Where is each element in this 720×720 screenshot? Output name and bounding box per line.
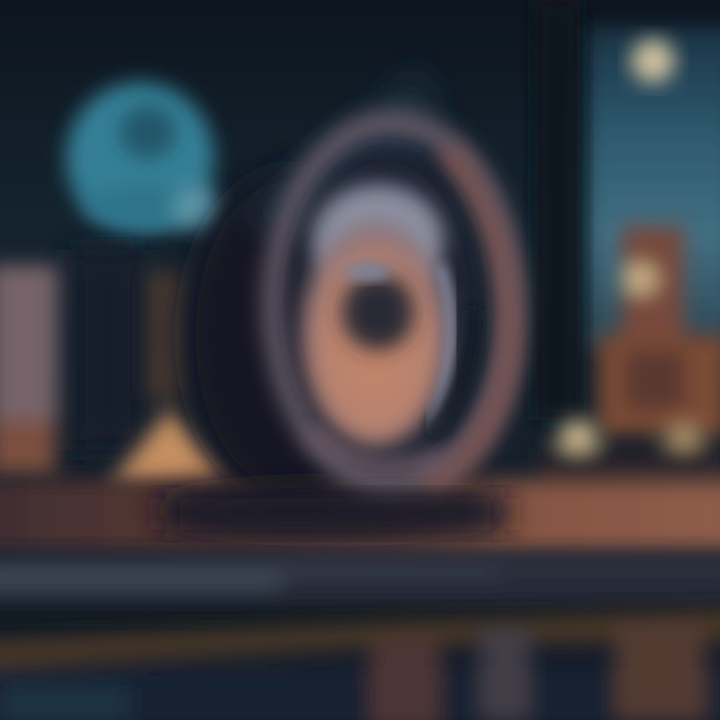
right inner ring (432, 265, 451, 425)
pale upper band (312, 184, 444, 296)
wheel face (301, 223, 449, 447)
dark support under circle (70, 250, 145, 450)
lower ring (310, 430, 445, 466)
hub (342, 274, 414, 350)
icon: teal circle (66, 82, 220, 234)
wheel body (185, 170, 395, 500)
dark column beside window (535, 0, 580, 420)
dark bench band (0, 555, 720, 620)
wheel shadow base (155, 484, 505, 536)
panel: right window (586, 28, 720, 348)
front base shadow (165, 498, 505, 530)
light: window glow (631, 39, 675, 83)
lower reflection strip (0, 610, 720, 720)
glowing cone (108, 270, 232, 486)
table surface (0, 420, 720, 552)
dark ring (290, 150, 480, 460)
machine wheel (155, 70, 511, 536)
building on right (598, 226, 720, 435)
left pillar (0, 265, 58, 475)
outer ring (275, 123, 511, 483)
